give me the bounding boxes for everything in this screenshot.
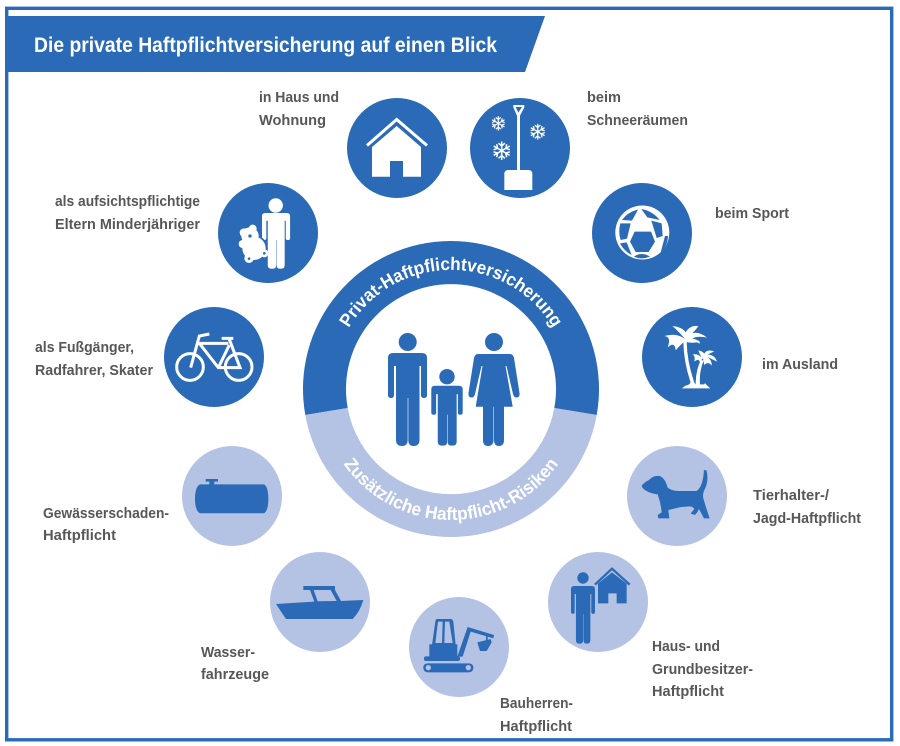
label: Wohnung xyxy=(259,113,326,129)
child xyxy=(431,369,463,446)
item: snow clearing xyxy=(470,90,688,198)
label xyxy=(259,90,339,129)
label: Haftpflicht xyxy=(500,719,572,735)
label: Radfahrer, Skater xyxy=(35,363,153,379)
item: supervising parents xyxy=(55,183,318,283)
ring segment: additional risks xyxy=(305,408,597,537)
central ring xyxy=(303,241,599,537)
title banner xyxy=(5,16,545,72)
item: house and property owner liability xyxy=(548,552,753,700)
item: house and flat xyxy=(259,90,447,198)
label: Bauherren- xyxy=(500,696,573,712)
label: Grundbesitzer- xyxy=(652,662,753,678)
icon: family xyxy=(388,333,520,446)
item: sport xyxy=(592,183,789,283)
circle with bicycle icon xyxy=(164,307,264,407)
mother xyxy=(468,333,520,446)
label: fahrzeuge xyxy=(201,667,269,683)
label: Gewässerschaden- xyxy=(43,506,169,522)
label xyxy=(587,90,688,129)
item: abroad xyxy=(642,307,838,407)
label: als aufsichtspflichtige xyxy=(55,194,200,210)
circle with house icon xyxy=(347,98,447,198)
label: im Ausland xyxy=(762,357,838,373)
label xyxy=(55,194,200,233)
circle with excavator icon xyxy=(409,597,509,697)
title: Die private Haftpflichtversicherung auf einen Blick xyxy=(34,34,497,57)
ring label: bottom: Zusätzliche Haftpflicht-Risiken xyxy=(344,458,558,524)
label xyxy=(35,340,153,379)
label: Haus- und xyxy=(652,639,720,655)
circle with football icon xyxy=(592,183,692,283)
label: als Fußgänger, xyxy=(35,340,134,356)
circle with tank icon xyxy=(182,446,282,546)
item: water damage liability xyxy=(43,446,282,546)
circle with dog icon xyxy=(627,446,727,546)
label: Jagd-Haftpflicht xyxy=(753,511,861,527)
label: Eltern Minderjähriger xyxy=(55,217,200,233)
label: Tierhalter-/ xyxy=(753,488,829,504)
circle with owner and house icon xyxy=(548,552,648,652)
label: in Haus und xyxy=(259,90,339,106)
label xyxy=(500,696,573,735)
label xyxy=(201,645,269,683)
label: Haftpflicht xyxy=(43,528,116,544)
item: pedestrians and cyclists xyxy=(35,307,264,407)
label xyxy=(753,488,861,527)
ring label: top: Privat-Haftpflichtversicherung xyxy=(339,256,561,328)
label: Wasser- xyxy=(201,645,255,661)
item: builder liability xyxy=(409,597,573,735)
label xyxy=(652,639,753,700)
item: animal keeper liability xyxy=(627,446,861,546)
label xyxy=(43,506,169,544)
circle with parent and teddy icon xyxy=(218,183,318,283)
circle with palm icon xyxy=(642,307,742,407)
ring segment: private liability xyxy=(303,241,599,415)
father xyxy=(388,333,427,446)
item: watercraft xyxy=(201,552,370,683)
label: Haftpflicht xyxy=(652,684,724,700)
label: Schneeräumen xyxy=(587,113,688,129)
label: beim Sport xyxy=(715,206,789,222)
label: beim xyxy=(587,90,621,106)
circle with shovel icon xyxy=(470,98,570,198)
circle with boat icon xyxy=(270,552,370,652)
